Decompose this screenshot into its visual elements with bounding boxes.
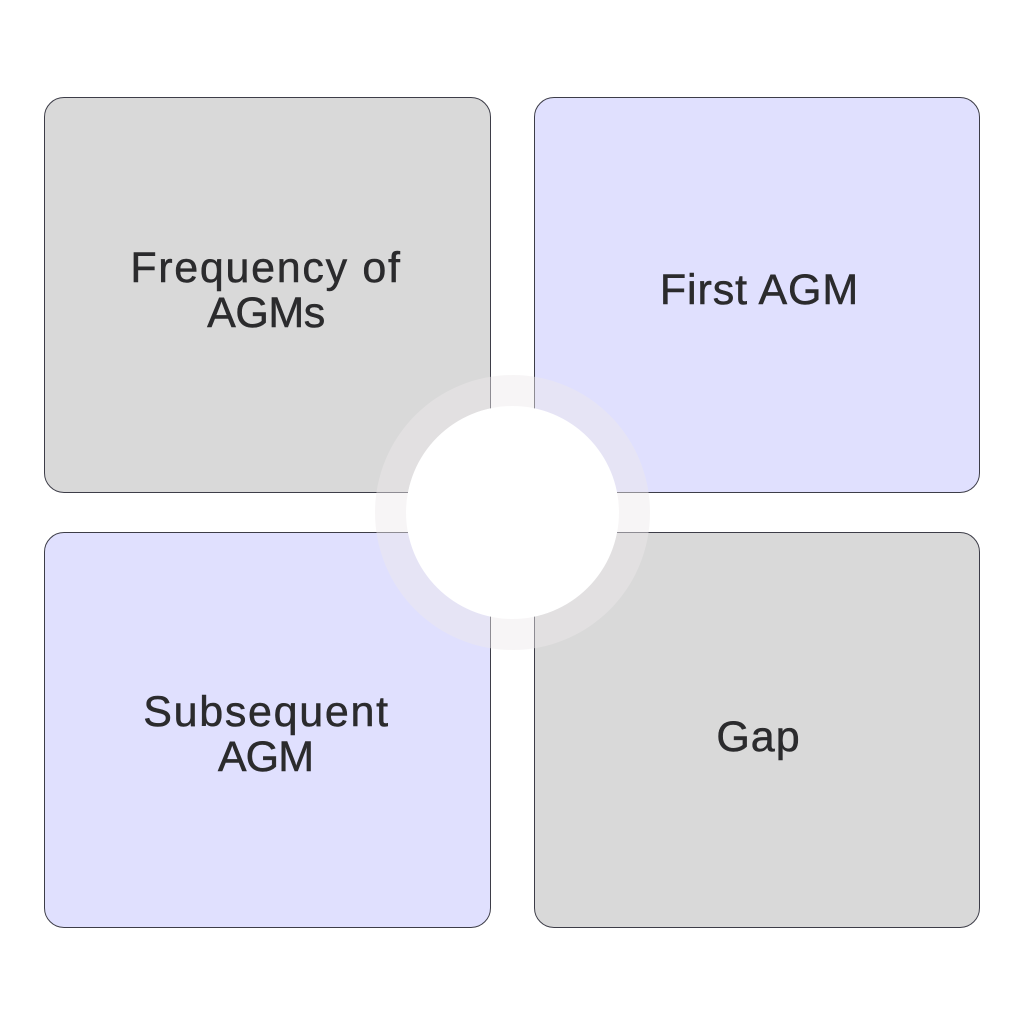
center ring xyxy=(374,374,650,650)
heading: Frequency of AGMs: AGMs xyxy=(207,289,325,337)
heading: Subsequent AGM: Subsequent xyxy=(143,688,390,736)
heading: Frequency of AGMs xyxy=(130,244,402,337)
heading: Subsequent AGM xyxy=(143,688,390,781)
heading: Frequency of AGMs: Frequency of xyxy=(130,244,402,292)
panel: Frequency of AGMs xyxy=(44,97,491,493)
panel: Subsequent AGM xyxy=(44,532,491,928)
panel: Gap xyxy=(534,532,980,928)
panel: First AGM xyxy=(534,97,980,493)
heading: Gap: Gap xyxy=(716,713,801,761)
heading: First AGM: First AGM xyxy=(660,266,859,314)
heading: Subsequent AGM: AGM xyxy=(218,733,313,781)
